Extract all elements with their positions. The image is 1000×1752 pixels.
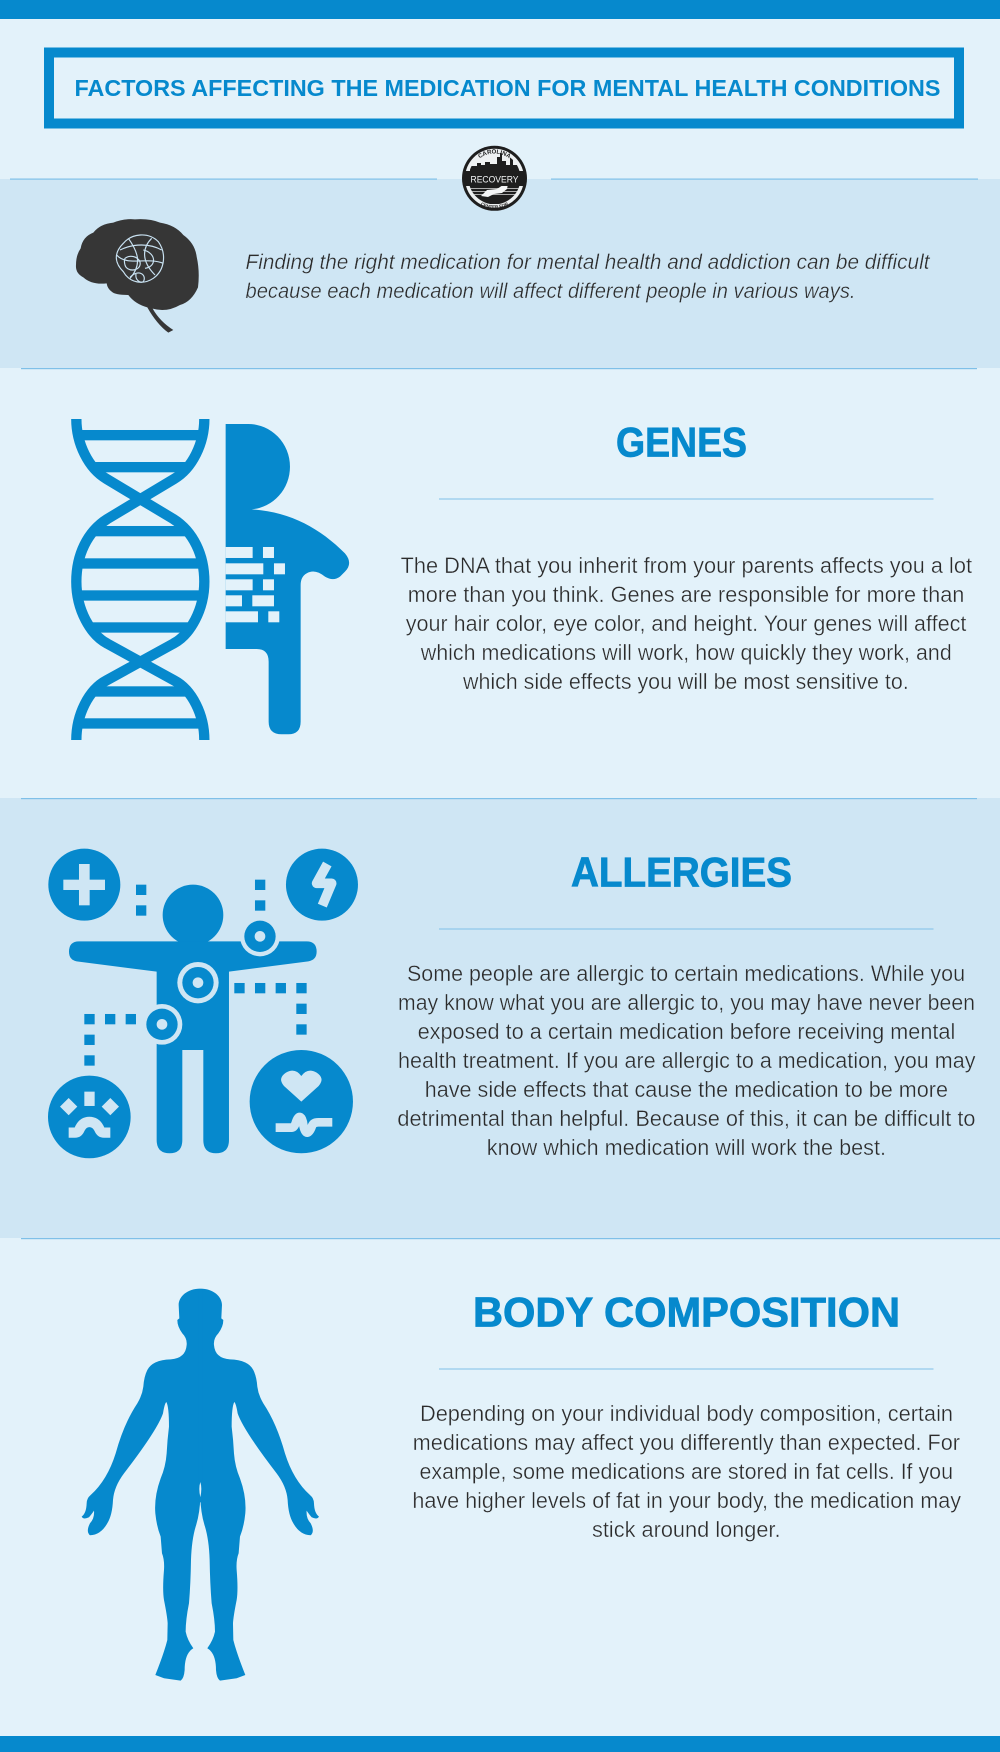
icon: DNA helix	[76, 419, 204, 740]
icon: sad face circle	[48, 1076, 131, 1158]
body composition text	[412, 1401, 961, 1542]
panel: allergies	[0, 798, 1000, 1239]
icon: human figure with targets	[69, 885, 317, 1153]
heading: genes: GENES	[616, 418, 747, 466]
allergies text	[397, 961, 975, 1160]
logo: Carolina Recovery	[462, 146, 527, 211]
genes text: your hair color, eye color, and height. Your genes will affect	[406, 611, 966, 636]
top bar	[0, 0, 1000, 19]
genes text: The DNA that you inherit from your parents affects you a lot	[401, 553, 972, 578]
allergies text: may know what you are allergic to, you may have never been	[398, 990, 975, 1015]
allergies text: detrimental than helpful. Because of this, it can be difficult to	[397, 1106, 975, 1131]
icon: half-human figure with pixelated chest	[226, 424, 349, 734]
body composition text: Depending on your individual body composition, certain	[420, 1401, 953, 1426]
allergies text: Some people are allergic to certain medications. While you	[407, 961, 965, 986]
heading: body composition: BODY COMPOSITION	[473, 1288, 900, 1336]
bottom bar	[0, 1736, 1000, 1752]
allergies text: have side effects that cause the medication to be more	[425, 1077, 948, 1102]
genes text	[401, 553, 972, 694]
intro text	[246, 250, 930, 303]
logo: Carolina Recovery: CENTER FOR	[481, 202, 508, 208]
icon: lightning bolt circle	[286, 849, 358, 921]
icon: plus circle	[48, 849, 120, 921]
title: FACTORS AFFECTING THE MEDICATION FOR MENTAL HEALTH CONDITIONS	[74, 75, 940, 101]
icon: body with symptom callouts	[48, 849, 358, 1158]
panel: body composition	[82, 1288, 961, 1681]
icon: brain with tangled thoughts	[76, 219, 199, 333]
body composition text: stick around longer.	[592, 1517, 780, 1542]
intro text: Finding the right medication for mental health and addiction can be difficult	[246, 250, 930, 274]
icon: heart and pulse circle	[250, 1050, 353, 1153]
icon: human body silhouette	[82, 1289, 319, 1681]
allergies text: health treatment. If you are allergic to a medication, you may	[398, 1048, 976, 1073]
intro text: because each medication will affect different people in various ways.	[246, 279, 856, 303]
panel: intro	[0, 178, 1000, 369]
genes text: more than you think. Genes are responsible for more than	[408, 582, 964, 607]
allergies text: know which medication will work the best.	[487, 1135, 886, 1160]
body composition text: example, some medications are stored in fat cells. If you	[420, 1459, 953, 1484]
genes text: which medications will work, how quickly they work, and	[420, 640, 952, 665]
heading: allergies: ALLERGIES	[571, 848, 792, 896]
body composition text: have higher levels of fat in your body, the medication may	[412, 1488, 961, 1513]
panel: genes	[76, 418, 972, 740]
allergies text: exposed to a certain medication before receiving mental	[418, 1019, 955, 1044]
title	[49, 52, 959, 124]
logo: Carolina Recovery: CAROLINA	[478, 149, 510, 158]
genes text: which side effects you will be most sensitive to.	[462, 669, 909, 694]
body composition text: medications may affect you differently than expected. For	[413, 1430, 960, 1455]
logo: Carolina Recovery: RECOVERY	[470, 174, 519, 186]
